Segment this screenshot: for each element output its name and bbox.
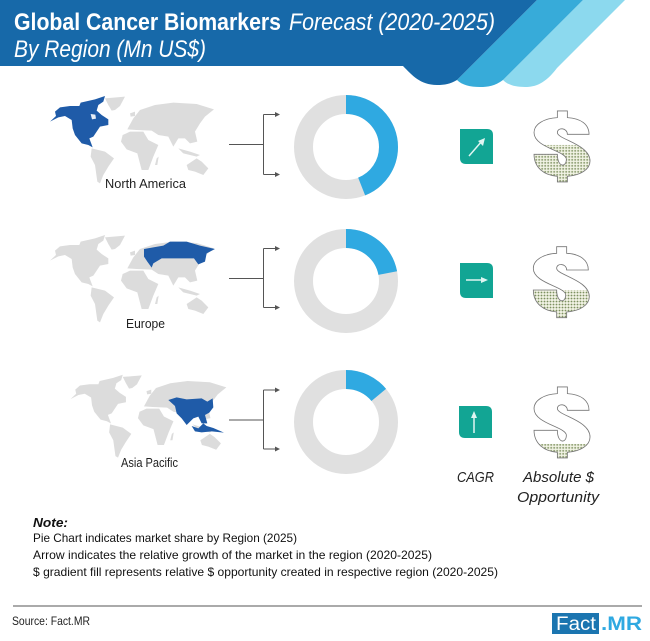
- icon: dollar with fill level: [532, 246, 590, 318]
- icon: CAGR arrow right: [460, 263, 493, 298]
- label: Europe: Europe: [126, 316, 165, 331]
- title line two: By Region (Mn US$): [14, 36, 206, 63]
- map: North America: [50, 96, 214, 183]
- icon: CAGR arrow up: [459, 406, 492, 438]
- map: Asia Pacific: [71, 375, 226, 458]
- header banner: [0, 0, 625, 87]
- title line one: Forecast (2020-2025): [289, 9, 495, 36]
- label: Asia Pacific: Asia Pacific: [121, 455, 178, 470]
- label: North America: North America: [105, 176, 187, 191]
- column label: Absolute $ Opportunity: [517, 469, 601, 506]
- donut chart: Europe share: [304, 238, 388, 324]
- note block: Note:: [33, 515, 68, 530]
- column label: Absolute $ Opportunity: Absolute $: [522, 469, 595, 486]
- column label: Absolute $ Opportunity: Opportunity: [517, 489, 601, 506]
- note block: $ gradient fill represents relative $ opportunity created in respective region (2020-2025): [33, 565, 498, 579]
- icon: dollar with fill level: [534, 386, 590, 458]
- panel: Europe: [50, 235, 593, 331]
- connector arrows: [229, 388, 280, 452]
- icon: dollar with fill level: [534, 110, 590, 182]
- connector arrows: [229, 112, 280, 177]
- panel: North America: [50, 96, 594, 191]
- map: Europe: [50, 235, 215, 322]
- panel: Asia Pacific: [71, 375, 594, 470]
- note block: Arrow indicates the relative growth of the market in the region (2020-2025): [33, 548, 432, 562]
- donut chart: North America share: [304, 104, 388, 190]
- icon: CAGR arrow up-right: [460, 129, 493, 164]
- column label: CAGR: CAGR: [457, 469, 494, 486]
- logo: Fact.MR: [552, 613, 642, 635]
- connector arrows: [229, 246, 280, 310]
- donut chart: Asia Pacific share: [304, 380, 388, 464]
- title line one: Global Cancer Biomarkers: [14, 9, 281, 36]
- logo: Fact.MR: Fact: [556, 614, 597, 635]
- logo: Fact.MR: .MR: [601, 614, 642, 635]
- note block: [33, 515, 498, 579]
- note block: Pie Chart indicates market share by Region (2025): [33, 531, 297, 545]
- source line: Source: Fact.MR: [12, 614, 90, 628]
